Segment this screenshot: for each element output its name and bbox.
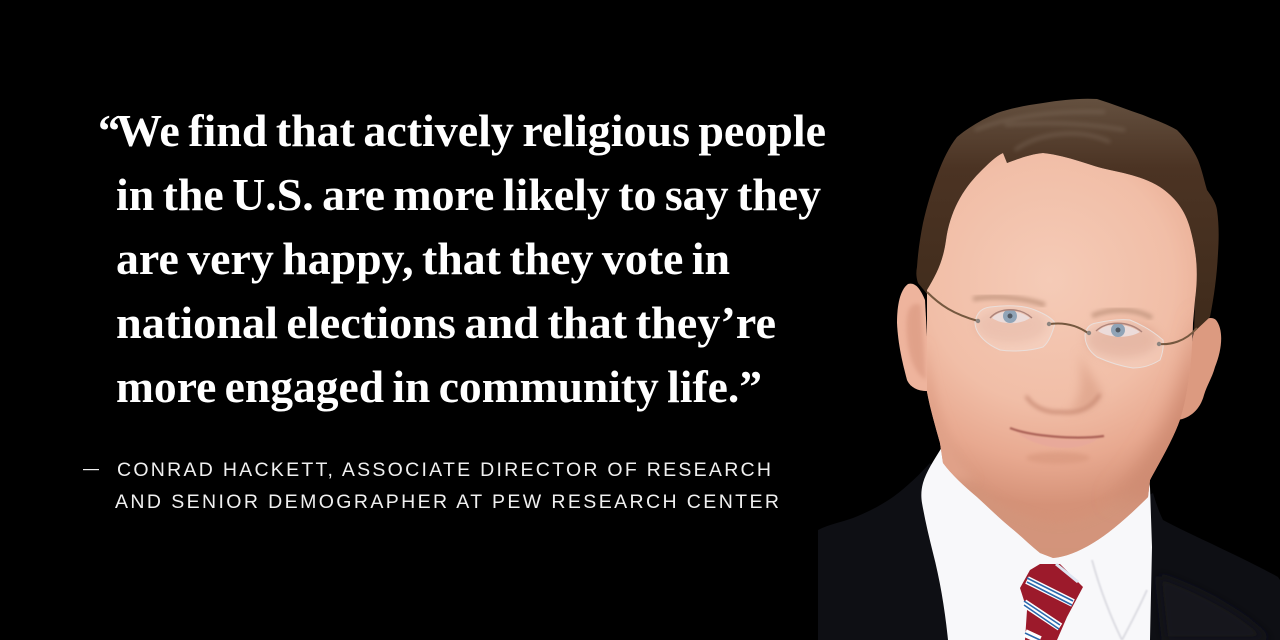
- left ear: [897, 284, 930, 391]
- quote text: We find that actively religious people: [116, 106, 826, 156]
- quote text: “: [98, 106, 120, 156]
- striped tie: [1020, 564, 1083, 640]
- shirt: [921, 447, 1152, 640]
- attribution: AND SENIOR DEMOGRAPHER AT PEW RESEARCH CENTER: [115, 491, 779, 513]
- suit jacket: [818, 463, 1280, 640]
- quote text: are very happy, that they vote in: [116, 234, 730, 284]
- quote text: national elections and that they’re: [116, 298, 776, 348]
- attribution: CONRAD HACKETT, ASSOCIATE DIRECTOR OF RESEARCH: [117, 459, 771, 481]
- jaw shading left: [927, 382, 966, 480]
- eye socket shadow: [978, 308, 1046, 341]
- right ear: [1178, 318, 1221, 420]
- quote text: more engaged in community life.”: [116, 362, 762, 412]
- neck shadow: [954, 461, 1160, 558]
- quote text: in the U.S. are more likely to say they: [116, 170, 822, 220]
- ear inner shading: [907, 304, 926, 380]
- hair highlights: [975, 112, 1125, 150]
- cheek shading right: [1137, 335, 1192, 504]
- left eye: [990, 309, 1032, 323]
- face and neck: [920, 145, 1205, 565]
- mouth line: [1010, 428, 1104, 438]
- nose shadow: [1074, 364, 1102, 408]
- nostril crease: [1026, 394, 1100, 412]
- portrait of Conrad Hackett: [818, 99, 1280, 640]
- rimless glasses: [927, 292, 1197, 368]
- collar shadows: [1092, 560, 1147, 640]
- lower lip: [1024, 436, 1028, 438]
- chin shadow under lip: [1028, 452, 1087, 464]
- right eye: [1096, 323, 1142, 337]
- quote text: [98, 106, 826, 412]
- attribution: [83, 459, 779, 513]
- left eyebrow: [973, 297, 1045, 305]
- hair: [916, 99, 1219, 332]
- right eyebrow: [1092, 310, 1152, 318]
